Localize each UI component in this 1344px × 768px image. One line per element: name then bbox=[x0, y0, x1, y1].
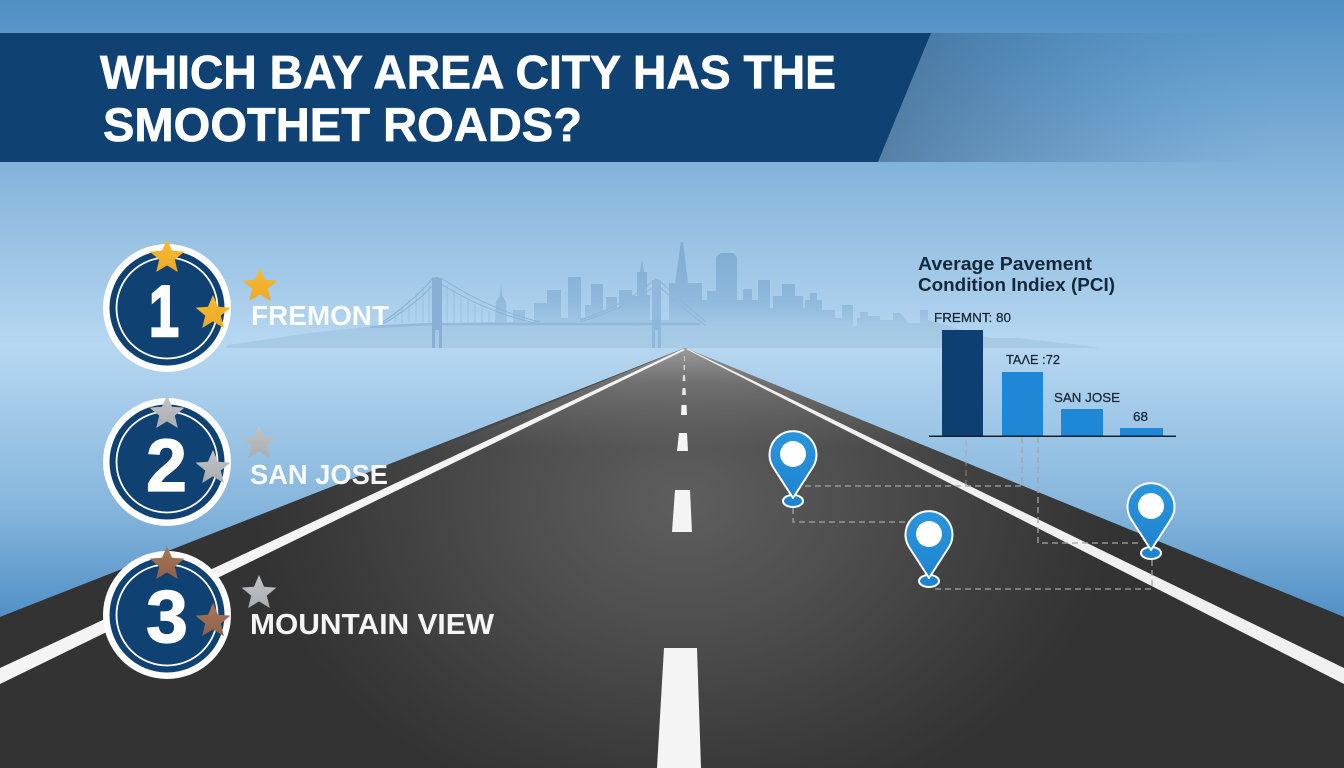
right bridge tower bbox=[652, 279, 661, 348]
chart title: Average Pavement bbox=[918, 254, 1092, 274]
bar labels bbox=[934, 310, 1148, 424]
bar labels: FREMNT: 80 bbox=[934, 310, 1011, 325]
skyline silhouette with haze base bbox=[225, 242, 1097, 348]
asphalt base bbox=[0, 348, 1344, 768]
header banner bbox=[0, 33, 1344, 162]
bar labels: TAΛE :72 bbox=[1006, 352, 1060, 367]
road bbox=[0, 348, 1344, 768]
city skyline and bridges bbox=[225, 242, 1097, 348]
banner panel bbox=[0, 33, 931, 162]
bar labels: 68 bbox=[1133, 409, 1148, 424]
rank 3 medal: Mountain View: MOUNTAIN VIEW bbox=[250, 609, 495, 641]
left bridge tower bbox=[432, 277, 442, 348]
asphalt centre lighting bbox=[0, 348, 1344, 768]
rank 1 medal: Fremont: FREMONT bbox=[251, 300, 389, 331]
axis bbox=[929, 436, 1176, 437]
rank 1 medal: Fremont: 1 bbox=[149, 272, 179, 352]
map pin 3 bbox=[1128, 483, 1174, 559]
left edge line bbox=[0, 349, 685, 684]
rank 3 medal: Mountain View: 3 bbox=[146, 575, 188, 658]
right suspension bridge bbox=[580, 282, 706, 326]
title: WHICH BAY AREA CITY HAS THE bbox=[100, 46, 836, 98]
dashed connector lines bbox=[793, 437, 1152, 589]
bar chart: average pavement condition index bbox=[918, 254, 1176, 437]
rank 2 medal: San Jose: SAN JOSE bbox=[250, 459, 388, 490]
rank 1 medal: Fremont bbox=[103, 239, 389, 372]
chart title: Condition Indiex (PCI) bbox=[918, 275, 1115, 295]
centre dashes bbox=[657, 356, 701, 768]
banner fade bbox=[878, 33, 1344, 162]
horizon glow on asphalt bbox=[422, 348, 948, 455]
rank 2 medal: San Jose bbox=[103, 395, 388, 526]
left suspension bridge bbox=[370, 277, 700, 327]
map pin 2 bbox=[906, 511, 952, 587]
title: SMOOTHET ROADS? bbox=[103, 98, 582, 151]
rank 2 medal: San Jose: 2 bbox=[146, 424, 187, 507]
chart title bbox=[918, 254, 1115, 295]
bar labels: SAN JOSE bbox=[1054, 390, 1120, 405]
right edge line bbox=[686, 349, 1344, 684]
rank 3 medal: Mountain View bbox=[103, 546, 495, 679]
map pin 1 bbox=[770, 431, 816, 507]
bars bbox=[942, 330, 983, 436]
title bbox=[100, 46, 836, 151]
